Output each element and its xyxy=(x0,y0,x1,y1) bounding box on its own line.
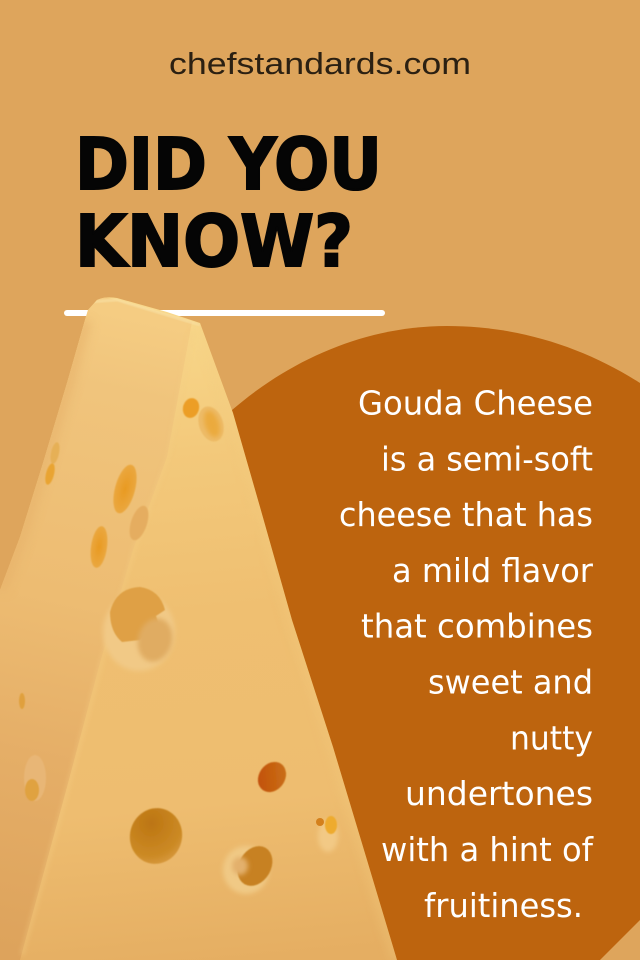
title: DID YOU xyxy=(75,123,382,206)
description text: nutty xyxy=(510,718,593,757)
title: KNOW? xyxy=(75,200,353,283)
cheese holes: lower xyxy=(19,693,338,894)
cheese body xyxy=(0,290,400,960)
cheese holes: large central cavity xyxy=(103,587,177,671)
description text: undertones xyxy=(405,774,593,813)
description text: fruitiness. xyxy=(424,886,583,925)
divider line xyxy=(64,310,385,316)
description text: with a hint of xyxy=(381,830,594,869)
website name: chefstandards.com xyxy=(169,46,471,81)
cheese wedge xyxy=(0,290,400,960)
brown rounded panel xyxy=(200,326,640,960)
description text: is a semi-soft xyxy=(381,439,593,478)
description text: that combines xyxy=(361,607,593,646)
description text: Gouda Cheese xyxy=(358,384,593,422)
description text: a mild flavor xyxy=(392,551,593,590)
description text xyxy=(339,384,594,925)
title xyxy=(75,123,382,283)
description text: cheese that has xyxy=(339,495,593,534)
description text: sweet and xyxy=(428,662,593,702)
cheese holes: upper xyxy=(43,396,228,569)
